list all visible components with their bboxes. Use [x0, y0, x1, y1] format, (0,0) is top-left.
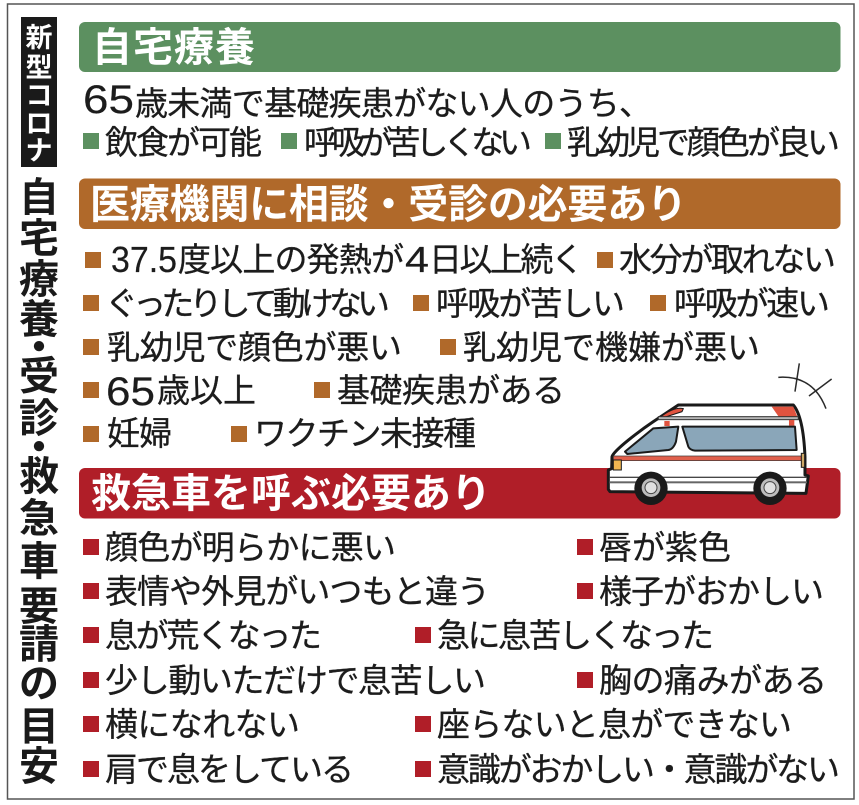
list: consultation conditions: 乳幼児で機嫌が悪い: [463, 321, 760, 369]
list: emergency conditions: 胸の痛みがある: [599, 654, 827, 702]
list: emergency conditions: 肩で息をしている: [105, 743, 354, 791]
text: intro line: 歳未満で基礎疾患がない人のうち、: [135, 77, 652, 125]
list: consultation conditions: 呼吸が苦しい: [436, 277, 625, 325]
list: consultation conditions: ぐったりして動けない: [105, 277, 390, 325]
list: consultation conditions: 妊婦: [107, 407, 172, 455]
list: emergency conditions: 座らないと息ができない: [437, 698, 792, 746]
list: emergency conditions: 急に息苦しくなった: [437, 609, 714, 657]
list: consultation conditions: 水分が取れない: [619, 233, 836, 281]
heading: 自宅療養: [79, 15, 840, 73]
list: home care conditions: 呼吸が苦しくない: [304, 116, 532, 164]
list: consultation conditions: ワクチン未接種: [254, 407, 476, 455]
list: consultation conditions: 基礎疾患がある: [337, 364, 565, 412]
panel: 救急車を呼ぶ: [79, 461, 840, 791]
list: consultation conditions: [83, 233, 836, 455]
panel: 自宅療養: [79, 15, 840, 164]
heading: 救急車を呼ぶ必要あり: [79, 461, 840, 519]
list: emergency conditions: [83, 521, 840, 791]
list: consultation conditions: 日以上続く: [429, 233, 584, 281]
list: emergency conditions: 横になれない: [105, 698, 300, 746]
heading: 自宅療養: 自宅療養: [92, 15, 255, 73]
list: emergency conditions: 表情や外見がいつもと違う: [105, 565, 490, 613]
icon: siren marks: [778, 363, 832, 409]
vertical title: 自宅療養・受診・救急車要請の目安: [19, 165, 59, 792]
list: consultation conditions: 呼吸が速い: [674, 277, 830, 325]
list: emergency conditions: 様子がおかしい: [599, 565, 824, 613]
sidebar label: 新型コロナ: 新型コロナ: [26, 16, 52, 168]
list: emergency conditions: 意識がおかしい・意識がない: [437, 743, 840, 791]
list: home care conditions: [83, 116, 840, 164]
icon: ambulance: [608, 363, 832, 505]
list: emergency conditions: 唇が紫色: [599, 521, 731, 569]
list: home care conditions: 乳幼児で顔色が良い: [567, 116, 840, 164]
list: emergency conditions: 少し動いただけで息苦しい: [105, 654, 486, 702]
list: consultation conditions: 度以上の発熱が: [178, 233, 404, 281]
heading: 医療機関に相談・受診の必要あり: 医療機関に相談・受診の必要あり: [90, 172, 687, 230]
list: consultation conditions: 歳以上: [157, 364, 256, 412]
panel: 医療機関に相談・受診: [79, 172, 840, 455]
list: consultation conditions: 4: [405, 239, 429, 280]
text: intro line: 65: [83, 78, 134, 122]
list: emergency conditions: 息が荒くなった: [105, 609, 322, 657]
list: consultation conditions: 65: [106, 370, 155, 414]
heading: 救急車を呼ぶ必要あり: 救急車を呼ぶ必要あり: [91, 461, 491, 519]
list: consultation conditions: 37.5: [111, 239, 177, 280]
list: emergency conditions: 顔色が明らかに悪い: [105, 521, 396, 569]
list: home care conditions: 飲食が可能: [105, 116, 262, 164]
list: consultation conditions: 乳幼児で顔色が悪い: [107, 321, 402, 369]
